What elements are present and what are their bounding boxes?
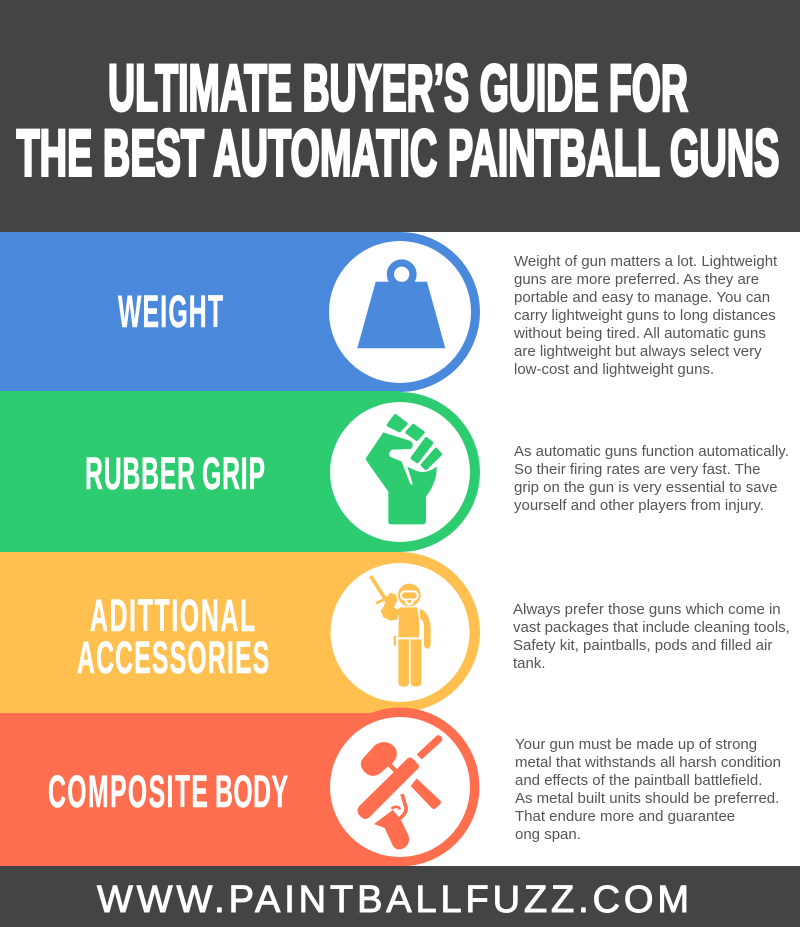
icon: raised fist [366,416,440,524]
description: weight: low-cost and lightweight guns. [514,361,714,378]
description: weight: portable and easy to manage. You can [514,289,770,306]
player head with mask [371,576,421,621]
description: additional accessories: tank. [513,655,546,672]
heading: weight: WEIGHT [118,286,224,337]
player body [394,607,431,687]
description: weight: without being tired. All automatic guns [513,325,766,342]
heading: rubber grip: RUBBER [85,448,196,499]
description: weight: carry lightweight guns to long distances [514,307,776,324]
description: composite body: metal that withstands all harsh condition [515,754,781,771]
heading: additional accessories: ADITTIONAL [90,590,257,641]
description: composite body [515,736,781,843]
description: rubber grip: As automatic guns function automatically. [514,443,789,460]
panel: additional accessories [0,552,790,713]
description: additional accessories: Safety kit, paintballs, pods and filled air [513,637,772,654]
description: composite body: That endure more and guarantee [515,808,735,825]
description: composite body: and effects of the paintball battlefield. [515,772,762,789]
icon: weight [357,263,445,348]
heading: rubber grip [85,448,266,499]
description: composite body: As metal built units should be preferred. [515,790,779,807]
footer url: WWW.PAINTBALLFUZZ.COM [97,879,689,921]
description: rubber grip [514,443,789,514]
description: rubber grip: So their firing rates are very fast. The [514,461,760,478]
description: additional accessories: vast packages that include cleaning tools, [513,619,790,636]
heading: additional accessories: ACCESSORIES [77,632,270,683]
title [16,50,779,190]
heading: composite body [48,766,288,817]
heading: composite body: BODY [215,766,288,817]
description: rubber grip: grip on the gun is very essential to save [514,479,777,496]
description: additional accessories: Always prefer those guns which come in [513,601,781,618]
description: weight: guns are more preferred. As they are [514,271,759,288]
panel: rubber grip [0,391,789,552]
header panel [0,0,800,232]
description: weight: are lightweight but always select very [514,343,762,360]
icon: paintball player [371,576,431,687]
icon: paintball gun [357,735,442,849]
description: composite body: ong span. [515,826,581,843]
description: composite body: Your gun must be made up of strong [515,736,757,753]
description: weight: Weight of gun matters a lot. Lightweight [514,253,778,270]
panel: composite body [0,708,781,866]
heading: additional accessories [77,590,270,683]
description: weight [513,253,778,378]
heading: rubber grip: GRIP [202,448,266,499]
description: rubber grip: yourself and other players from injury. [514,497,764,514]
panel: weight [0,232,778,392]
description: additional accessories [513,601,790,672]
footer panel [0,866,800,927]
heading: composite body: COMPOSITE [48,766,209,817]
